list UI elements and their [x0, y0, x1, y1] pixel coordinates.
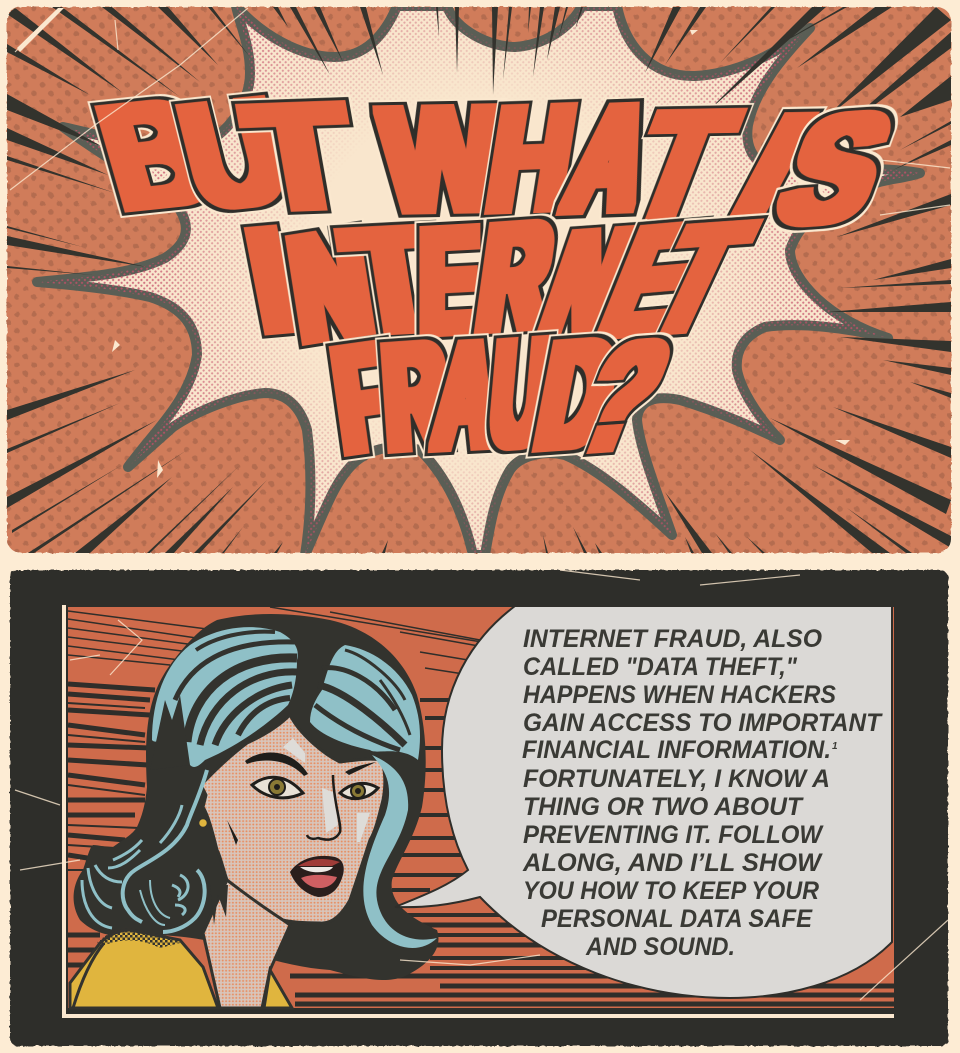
hair silhouette: [74, 614, 438, 980]
bubble text: [522, 625, 884, 961]
right blue hair: [310, 645, 420, 760]
face: [201, 715, 385, 923]
forehead highlight: [283, 738, 305, 763]
title line 2: T: [333, 195, 451, 364]
bubble text: YOU HOW TO KEEP YOUR: [523, 877, 819, 905]
cream inner frame: [64, 605, 894, 1016]
title line 1: S: [760, 81, 910, 257]
eyebrows: [245, 752, 376, 776]
right eye: [340, 783, 378, 799]
title line 3: ?: [558, 309, 689, 484]
panel: title burst: [7, 6, 951, 555]
title line 3: F: [325, 312, 402, 483]
bubble text: 1: [832, 741, 838, 752]
left blue hair: [152, 627, 298, 767]
bubble text: FORTUNATELY, I KNOW A: [523, 765, 830, 793]
speed lines: [7, 7, 951, 553]
blouse halftone shoulder: [97, 926, 184, 948]
halftone orange background: [7, 7, 951, 553]
title line 2: T: [625, 191, 773, 366]
title line 2: E: [420, 195, 479, 365]
neck: [203, 880, 290, 1008]
title line 1: [85, 68, 910, 257]
speech bubble: [395, 606, 892, 998]
title line 3: R: [379, 310, 452, 481]
yellow blouse left: [70, 930, 218, 1008]
left eye: [252, 777, 303, 798]
title line 2: I: [235, 198, 307, 363]
title line 3: [325, 307, 689, 484]
blouse seam: [73, 943, 104, 1008]
title line 2: [235, 190, 773, 372]
title line 1: W: [377, 75, 506, 242]
title line 1: B: [85, 69, 224, 240]
title line 3: A: [429, 311, 502, 480]
explosion burst shape: [37, 6, 920, 555]
title line 2: R: [470, 190, 560, 362]
cheek shadow: [227, 820, 238, 845]
dark panel background: [10, 570, 948, 1046]
title line 3: D: [527, 307, 627, 480]
bubble text: CALLED "DATA THEFT,": [523, 653, 798, 681]
panel: woman and speech bubble: [10, 570, 948, 1046]
yellow blouse right: [264, 970, 292, 1008]
right hair dark strands: [315, 650, 410, 750]
title: But what is internet fraud?: [85, 68, 910, 484]
title line 1: I: [707, 84, 839, 251]
title line 2: N: [524, 197, 650, 371]
title line 2: E: [582, 192, 719, 370]
orange comic background with stripes: [68, 607, 894, 1008]
bubble text: FINANCIAL INFORMATION.: [522, 736, 831, 764]
title line 2: N: [281, 197, 380, 372]
title line 1: T: [235, 73, 365, 241]
title line 1: H: [478, 74, 584, 244]
earring: [198, 818, 208, 828]
title line 1: T: [608, 81, 754, 248]
bubble text: GAIN ACCESS TO IMPORTANT: [523, 709, 884, 737]
bubble text: HAPPENS WHEN HACKERS: [523, 681, 836, 709]
title line 3: U: [485, 308, 555, 479]
left hair dark strands: [175, 632, 297, 745]
blue side lock: [363, 755, 437, 948]
nose: [322, 788, 338, 833]
cheek highlight: [357, 813, 370, 842]
eyes: [252, 777, 378, 799]
bubble text: THING OR TWO ABOUT: [523, 793, 805, 821]
mouth: [290, 856, 344, 897]
title line 1: U: [167, 68, 299, 239]
bubble text: PREVENTING IT. FOLLOW: [523, 821, 824, 849]
bubble text: ALONG, AND I’LL SHOW: [522, 849, 823, 877]
left side blue strands and curls: [82, 770, 207, 932]
bubble text: PERSONAL DATA SAFE: [541, 905, 813, 933]
title line 1: A: [552, 74, 666, 243]
neck shadow: [210, 885, 228, 925]
bubble text: INTERNET FRAUD, ALSO: [523, 625, 823, 653]
bubble text: AND SOUND.: [585, 933, 735, 961]
left hair dark mass: [150, 695, 190, 770]
woman illustration: [70, 614, 438, 1008]
